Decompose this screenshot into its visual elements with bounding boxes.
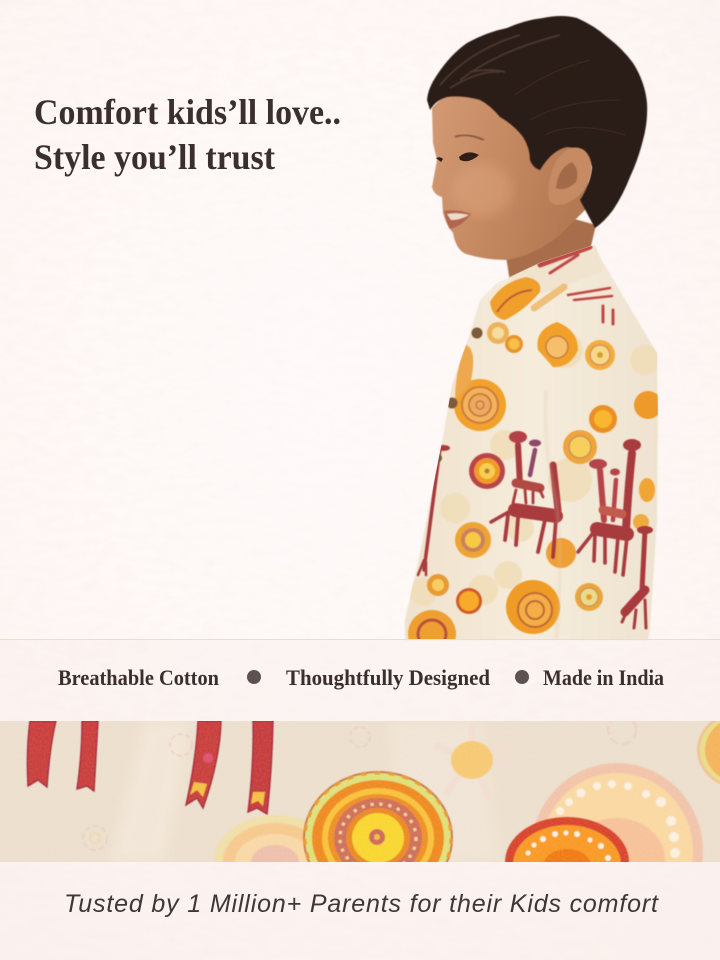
feature: breathable cotton: Breathable Cotton [58, 665, 219, 690]
pale right medallion [535, 762, 704, 862]
eyes and brow [436, 135, 484, 162]
faded flowers [83, 716, 636, 850]
ringed circles [427, 322, 655, 614]
sleeve fold shadow [545, 390, 560, 640]
pale motifs [409, 332, 660, 606]
trust line: Tusted by 1 Million+ Parents for their Kids comfort [64, 890, 659, 918]
collar [490, 245, 605, 320]
bullet dot [247, 670, 261, 684]
collar print [534, 247, 613, 324]
neck [505, 215, 596, 282]
ribbon 2 [77, 721, 98, 791]
bullet dot [515, 670, 529, 684]
ribbon 3 [186, 721, 221, 808]
hair [427, 16, 647, 228]
cheek highlight [452, 164, 512, 216]
feature: made in india: Made in India [543, 665, 664, 690]
orange medallion [504, 816, 630, 862]
faded left medallion [214, 814, 308, 862]
shirt print [408, 245, 662, 658]
heading [34, 92, 341, 177]
smile [444, 210, 471, 229]
corner medallion [696, 721, 720, 784]
yellow flower centre [451, 741, 493, 779]
bright medallion [302, 770, 454, 862]
fabric close-up band [0, 721, 720, 862]
fabric folds [118, 726, 488, 858]
feature strip divider and features [0, 639, 720, 690]
fabric grain [0, 721, 720, 862]
heading: Style you’ll trust [34, 137, 275, 177]
feature: thoughtfully designed: Thoughtfully Designed [286, 665, 490, 690]
heading: Comfort kids’ll love.. [34, 92, 341, 132]
buttons [434, 328, 482, 462]
giraffes [418, 431, 653, 628]
photo: child in printed kurta [405, 16, 662, 658]
shirt body [405, 245, 658, 640]
ribbon 1 [27, 721, 56, 787]
large orange medallions [408, 322, 662, 658]
ear [548, 148, 592, 205]
face [432, 90, 590, 260]
ribbon 4 [248, 721, 273, 814]
